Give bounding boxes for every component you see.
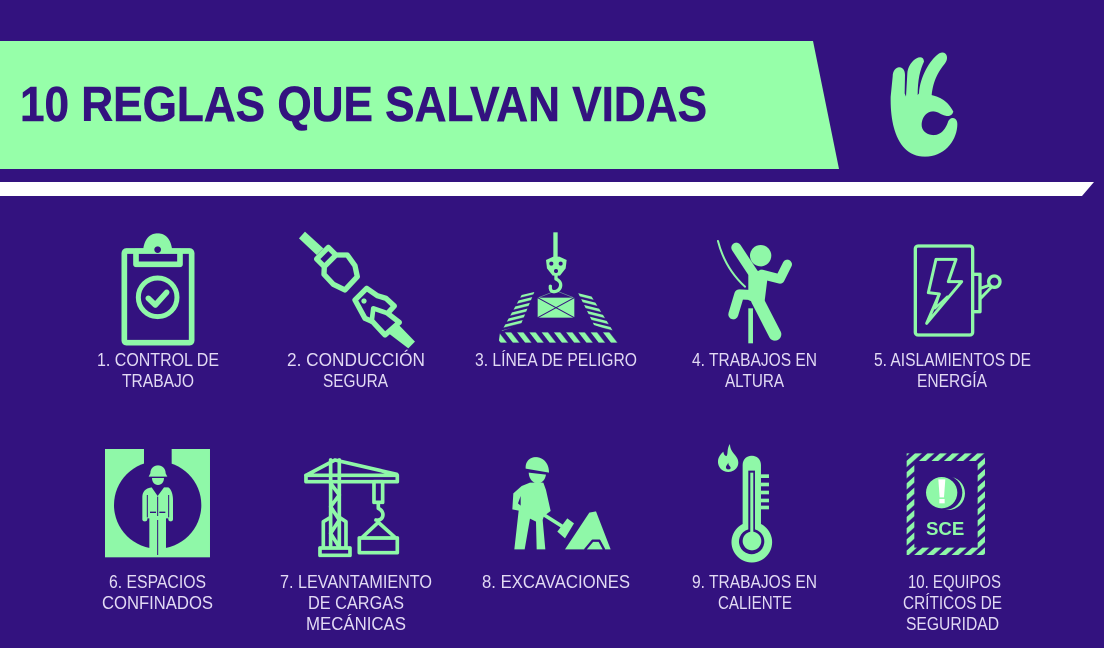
icon: SCE warning sign: SCE	[926, 518, 964, 539]
panel: rule 4	[692, 241, 817, 391]
icon: thermometer and flame	[718, 444, 772, 562]
icon: climber on rope	[718, 241, 787, 343]
icon: electrical isolation panel	[915, 246, 1000, 335]
label: espacios confinados	[102, 572, 213, 613]
title: 10 REGLAS QUE SALVAN VIDAS	[20, 78, 707, 132]
panel: rule 6	[102, 449, 213, 613]
label: trabajos en caliente: 9. TRABAJOS EN	[692, 572, 817, 592]
label: levantamiento de cargas mecánicas: MECÁNICAS	[306, 614, 406, 634]
panel: rule 9	[692, 444, 817, 613]
label: equipos críticos de seguridad: 10. EQUIPOS	[908, 572, 1001, 592]
label: aislamientos de energía	[874, 350, 1031, 391]
label: excavaciones: 8. EXCAVACIONES	[482, 572, 630, 592]
panel: rule 5	[874, 246, 1031, 391]
icon: worker digging with shovel	[512, 457, 611, 549]
label: equipos críticos de seguridad: CRÍTICOS DE	[903, 593, 1002, 613]
label: trabajos en altura	[692, 350, 817, 391]
icon: clipboard with check	[124, 233, 192, 343]
label: conducción segura: SEGURA	[323, 371, 388, 391]
icon: crane hook over danger zone	[499, 232, 619, 343]
icon: OK hand	[891, 53, 957, 157]
panel: rule 2	[287, 232, 425, 391]
label: conducción segura: 2. CONDUCCIÓN	[287, 349, 425, 370]
label: trabajos en altura: ALTURA	[725, 371, 784, 391]
icon: worker in confined space	[105, 449, 210, 557]
label: aislamientos de energía: ENERGÍA	[917, 371, 987, 391]
label: trabajos en caliente: CALIENTE	[718, 593, 792, 613]
label: conducción segura	[287, 349, 425, 391]
icon: seat belt	[299, 232, 415, 348]
label: espacios confinados: 6. ESPACIOS	[109, 572, 206, 592]
label: control de trabajo: 1. CONTROL DE	[97, 350, 219, 370]
title banner	[0, 41, 839, 169]
label: control de trabajo	[97, 350, 219, 391]
label: trabajos en altura: 4. TRABAJOS EN	[692, 350, 817, 370]
panel: rule 1	[97, 233, 219, 391]
label: levantamiento de cargas mecánicas: DE CARGAS	[308, 593, 404, 613]
panel: rule 8	[482, 457, 630, 592]
label: trabajos en caliente	[692, 572, 817, 613]
label: equipos críticos de seguridad: SEGURIDAD	[906, 614, 999, 634]
label: control de trabajo: TRABAJO	[122, 371, 194, 391]
label: levantamiento de cargas mecánicas	[280, 572, 432, 634]
label: equipos críticos de seguridad	[903, 572, 1002, 634]
icon: tower crane with load	[306, 460, 397, 555]
white stripe	[0, 182, 1094, 196]
icon: SCE warning sign	[907, 453, 985, 555]
label: espacios confinados: CONFINADOS	[102, 593, 213, 613]
panel: rule 3	[475, 232, 637, 370]
panel: rule 10	[903, 453, 1002, 634]
label: aislamientos de energía: 5. AISLAMIENTOS DE	[874, 350, 1031, 370]
label: línea de peligro: 3. LÍNEA DE PELIGRO	[475, 350, 637, 370]
panel: rule 7	[280, 460, 432, 634]
label: levantamiento de cargas mecánicas: 7. LEVANTAMIENTO	[280, 572, 432, 592]
